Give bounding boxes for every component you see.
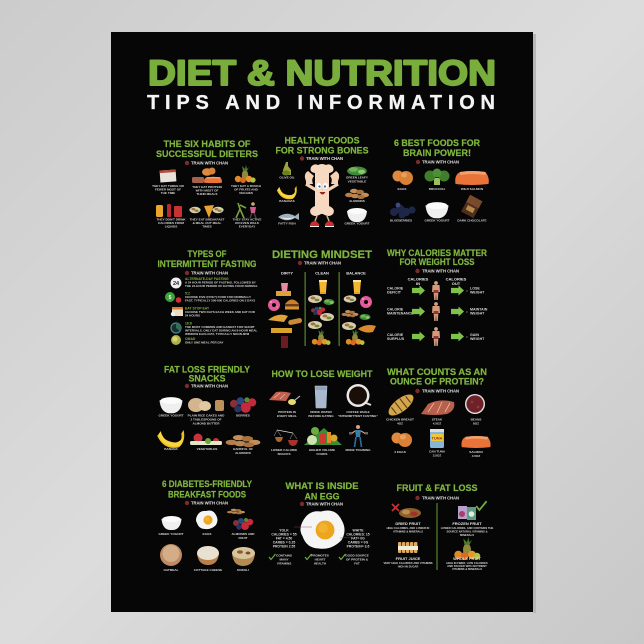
heading: DIETING MINDSET	[272, 249, 372, 261]
text: dried fruit: DRIED FRUIT	[395, 521, 421, 526]
row: maintenance: CALORIE	[387, 308, 403, 312]
icon: protein	[192, 168, 222, 183]
icon: check	[476, 501, 487, 510]
icon: fish	[278, 213, 299, 220]
row: maintenance: MAINTAIN	[470, 308, 487, 312]
heading: SUCCESSFUL DIETERS	[156, 149, 258, 160]
icon: broccoli	[424, 168, 450, 185]
icon: yogurt	[160, 397, 182, 413]
caption: MUESLI	[237, 568, 249, 572]
benefit: heart: HEALTH	[314, 562, 327, 566]
text: 16:8: WINDOW EACH DAY, TYPICALLY NOON-8PM	[185, 332, 250, 336]
icon: exercisers	[236, 202, 256, 218]
caption: OLIVE OIL	[279, 176, 295, 180]
heading	[276, 136, 368, 156]
caption: "INTERMITTENT FASTING"	[338, 414, 378, 418]
benefit: vitamins	[269, 554, 292, 566]
logo: TRAIN WITH CHAN	[304, 260, 341, 266]
caption: HIGHER VOLUME	[309, 448, 335, 452]
text: eat stop eat	[185, 306, 256, 318]
icon: beans	[465, 394, 485, 414]
row: maintenance: =	[466, 310, 468, 314]
panel: six habits	[152, 139, 262, 229]
icon: coffee cup	[346, 384, 371, 407]
caption: OATMEAL	[163, 568, 179, 572]
text: frozen fruit	[441, 521, 493, 537]
text: alternate day: THE 24-HOUR PERIOD OF EATING FOOD NORMAL	[185, 284, 258, 288]
icon: dark chocolate	[461, 195, 482, 218]
text: 16:8: THE MOST COMMON AND EASIEST FOR SHORT	[185, 325, 255, 329]
subtitle: TIPS AND INFORMATION	[147, 92, 495, 114]
icon: juice bottles	[398, 542, 418, 553]
caption: THEY EAT THREE OR	[152, 184, 184, 188]
heading: AN EGG	[304, 492, 340, 502]
icon: greens	[347, 166, 367, 176]
panel: diabetes breakfast	[158, 479, 255, 572]
caption: VEGGIES	[239, 191, 253, 195]
caption: 4.5OZ	[472, 454, 480, 458]
row: deficit: DEFICIT	[387, 290, 402, 294]
text: whole fruit: WHOLE FRUIT	[453, 556, 481, 561]
caption: GREEK YOGURT	[158, 532, 184, 536]
caption: EVERYDAY	[239, 225, 256, 229]
row: deficit: WEIGHT	[470, 290, 485, 294]
text: 5:2: FAST, TYPICALLY 500-600 CALORIES ON 2 DAYS	[185, 298, 255, 302]
icon: calendar	[171, 307, 183, 316]
column headers	[408, 276, 467, 286]
title: DIET & NUTRITION	[148, 54, 496, 93]
column headers: CALORIES	[408, 276, 428, 282]
caption: COFFEE WHILE	[346, 410, 370, 414]
caption: STEAK	[432, 418, 442, 422]
label: white: FAT= 0G	[351, 536, 365, 540]
heading: 6 DIABETES-FRIENDLY	[162, 479, 253, 490]
row: surplus: SURPLUS	[387, 337, 405, 341]
caption: 8OZ	[473, 422, 479, 426]
caption: THEY STAY ACTIVE	[233, 218, 261, 222]
row: surplus	[387, 327, 485, 346]
heading: WHAT IS INSIDE	[286, 481, 358, 492]
text: omad: OMAD	[185, 337, 196, 341]
caption: FOODS	[316, 452, 328, 456]
caption: SNACKS	[277, 452, 291, 456]
text: whole fruit: VITAMINS & MINERALS	[452, 567, 482, 571]
icon: steak	[421, 400, 454, 415]
column labels: BALANCE	[346, 270, 366, 276]
caption: 3 EGGS	[394, 450, 406, 454]
caption: BROCCOLI	[429, 187, 445, 191]
icon: 5:2: 5	[169, 295, 172, 301]
logo: TRAIN WITH CHAN	[306, 156, 343, 161]
benefit: vitamins: VITAMINS	[277, 562, 291, 566]
benefit: protein: OF PROTEIN &	[346, 558, 369, 562]
caption: WITH MOST OF	[196, 189, 219, 193]
caption: BANANAS	[279, 199, 295, 203]
poster shadow	[533, 34, 536, 613]
caption: THE TIME	[161, 191, 175, 195]
panel: ounce of protein	[385, 367, 491, 458]
caption: FATTY FISH	[278, 222, 296, 226]
icon: salmon	[455, 171, 489, 185]
icon: cottage cheese	[197, 546, 219, 565]
caption: GREEK YOGURT	[158, 414, 184, 418]
text: 5:2: 5:2	[185, 292, 190, 296]
caption: CAN TUNA	[429, 450, 445, 454]
heading: OUNCE OF PROTEIN?	[390, 376, 484, 388]
text: alternate day: A 24 HOUR PERIOD OF FASTING, FOLLOWED BY	[185, 280, 256, 284]
logo: TRAIN WITH CHAN	[422, 160, 459, 164]
label: yolk: YOLK	[279, 528, 289, 532]
icon: timer	[171, 323, 181, 333]
caption: HANDFUL OF	[233, 447, 253, 451]
text: whole fruit: AND PACKED WITH NUTRIENT	[447, 564, 487, 568]
text: omad: ONLY ONE MEAL PER DAY	[185, 340, 224, 344]
text: dried fruit: VITAMINS & MINERALS	[393, 530, 423, 534]
caption: GREEK YOGURT	[344, 222, 370, 226]
panel: dieting mindset	[268, 249, 376, 348]
icon: water glass	[315, 386, 327, 408]
heading: HOW TO LOSE WEIGHT	[272, 369, 373, 380]
icon: oatmeal	[160, 544, 182, 566]
row: maintenance	[387, 302, 488, 321]
icon: chicken breast	[385, 391, 417, 419]
column labels: CLEAN	[315, 270, 329, 276]
caption: THEY EAT A BUNCH	[231, 184, 261, 188]
text: frozen fruit: LOWER CALORIES, AND CONTAINS THE	[441, 526, 493, 530]
caption: EVERY MEAL	[277, 414, 297, 418]
heading: WHY CALORIES MATTER	[387, 248, 487, 259]
icon: yogurt	[347, 208, 367, 222]
icon: meals	[189, 205, 224, 218]
icon: fruit	[235, 165, 256, 183]
icon: eggs	[392, 432, 412, 447]
logo: TRAIN WITH CHAN	[422, 268, 459, 274]
panel: lose weight	[269, 369, 378, 456]
benefit: vitamins: CONTAINS	[276, 554, 292, 558]
icon: banana	[277, 186, 297, 199]
icon: vegetables	[190, 434, 222, 445]
caption: OF FRUITS AND	[234, 188, 259, 192]
heading: FAT LOSS FRIENDLY	[164, 364, 251, 376]
text: 5:2: CHOOSE FIVE (FIVE?) FOOD FOR NORMALLY	[185, 295, 251, 299]
text: 5:2	[185, 292, 255, 302]
icon: fried egg	[300, 511, 345, 549]
panel: why calories matter	[387, 248, 488, 346]
caption: MORE TRAINING	[345, 448, 371, 452]
heading: FOR STRONG BONES	[276, 146, 368, 156]
logo: TRAIN WITH CHAN	[191, 160, 228, 166]
caption: VEGETABLE	[348, 179, 366, 183]
benefit: vitamins: MANY	[279, 558, 289, 562]
text: omad	[185, 337, 224, 344]
caption: PROTEIN IN	[278, 410, 296, 414]
row: deficit	[387, 281, 485, 300]
heading	[394, 138, 480, 159]
text: eat stop eat: CHOOSE TWO DAYS EACH WEEK AND EAT FOR	[185, 310, 256, 314]
caption: VEGETABLES	[197, 447, 217, 451]
text: frozen fruit: SOURCE NATURAL VITAMINS &	[446, 530, 488, 534]
caption: ALMONDS	[235, 451, 251, 455]
heading	[286, 481, 358, 502]
text: whole fruit: HIGH IN FIBER, LOW CALORIES	[446, 561, 488, 565]
benefit: protein: GOOD SOURCE	[345, 554, 369, 558]
column labels: DIRTY	[281, 270, 293, 276]
label: yolk: PROTEIN 2.55	[273, 544, 295, 548]
column: balance foods	[342, 280, 376, 345]
icon: omad plate	[171, 335, 181, 345]
caption: BERRIES	[236, 414, 250, 418]
caption: GREEK YOGURT	[424, 218, 450, 222]
row: maintenance: MAINTENANCE	[387, 312, 414, 316]
caption: DRINK WATER	[310, 410, 332, 414]
caption: 3.5OZ	[433, 454, 441, 458]
text: fruit juice: FRUIT JUICE	[396, 556, 421, 561]
text: eat stop eat: EAT STOP EAT	[185, 306, 210, 310]
text: dried fruit: HIGH CALORIES, AND LOWER IN	[387, 526, 429, 530]
icon: almonds	[226, 435, 260, 447]
benefit: protein	[339, 554, 369, 566]
caption: DARK CHOCOLATE	[457, 218, 487, 222]
heading: HEALTHY FOODS	[284, 136, 360, 146]
caption: CHICKEN BREAST	[386, 418, 414, 422]
caption: SALMON	[469, 450, 483, 454]
icon: meat and protein scoop	[269, 392, 300, 405]
poster panel	[111, 32, 533, 612]
row: deficit: LOSE	[470, 286, 480, 290]
caption: 2 TABLESPOONS OF	[190, 418, 222, 422]
text: 16:8	[185, 322, 258, 336]
icon: blueberries	[390, 203, 416, 218]
row: deficit: CALORIE	[387, 286, 403, 290]
heading: THE SIX HABITS OF	[164, 139, 251, 150]
text: dried fruit	[387, 521, 429, 534]
logo: TRAIN WITH CHAN	[422, 388, 459, 394]
icon: whole fruit	[454, 537, 480, 560]
caption: THEY DON'T DRINK	[156, 218, 186, 222]
row: surplus: CALORIE	[387, 333, 403, 337]
caption: OR EVEN WALK	[235, 221, 260, 225]
caption: BLUEBERRIES	[390, 218, 412, 222]
caption: CALORIES FROM	[158, 221, 184, 225]
icon: salmon	[461, 436, 491, 448]
caption: EGGS	[398, 187, 406, 191]
icon: canned tuna: TUNA	[431, 436, 443, 440]
caption: & MEAL OUT MEAL	[193, 221, 222, 225]
heading: WHAT COUNTS AS AN	[387, 367, 487, 378]
icon: almonds	[345, 189, 369, 199]
label: yolk: CALORIES = 55	[271, 532, 297, 536]
label: white: PROTEIN= 3.6	[347, 544, 369, 548]
caption: PLAIN RICE CAKES AND	[188, 414, 224, 418]
icon: drinks	[156, 204, 182, 217]
caption: GREEN LEAFY	[346, 176, 368, 180]
icon: cross	[392, 504, 399, 511]
icon: frozen fruit bags	[458, 506, 476, 520]
column: dirty foods	[268, 283, 302, 348]
text: frozen fruit: FROZEN FRUIT	[452, 521, 482, 526]
caption: THEY EAT BREAKFAST	[190, 218, 224, 222]
text: whole fruit	[446, 556, 488, 571]
caption: LIQUIDS	[165, 225, 177, 229]
benefit: heart	[305, 554, 329, 566]
icon: dried fruit	[399, 508, 421, 518]
heading	[387, 248, 487, 268]
heading: INTERMITTENT FASTING	[158, 259, 256, 270]
text: fruit juice: VERY HIGH CALORIES AND VITAMINS	[383, 561, 433, 565]
panel: strong bones	[276, 136, 370, 227]
icon: yogurt	[426, 202, 448, 218]
icon: fried egg	[196, 510, 218, 529]
panel: snacks	[157, 364, 260, 455]
caption: THEIR MEALS	[197, 192, 217, 196]
icon: eggs	[392, 170, 413, 185]
icon: 24 clock: 24	[173, 281, 180, 287]
row: surplus: GAIN	[470, 333, 479, 337]
caption: ALMOND BUTTER	[193, 422, 220, 426]
heading: BREAKFAST FOODS	[168, 490, 246, 500]
icon: almonds and berries	[227, 509, 253, 530]
caption: WILD SALMON	[461, 187, 484, 191]
heading	[387, 367, 487, 388]
column headers: OUT	[452, 281, 461, 286]
icon: vegetables	[304, 427, 342, 445]
caption: ALMONDS AND	[231, 532, 255, 536]
caption: BEFORE EATING	[308, 414, 334, 418]
heading	[156, 139, 258, 160]
heading: 6 BEST FOODS FOR	[394, 138, 480, 149]
icon: scale	[274, 430, 298, 446]
heading: TYPES OF	[188, 249, 227, 260]
logo: TRAIN WITH CHAN	[191, 270, 228, 276]
row: surplus: =	[466, 335, 468, 339]
caption: LOWER CALORIE	[271, 448, 297, 452]
text: eat stop eat: 24 HOURS	[185, 314, 200, 318]
icon: banana	[157, 430, 184, 448]
caption: BANANA	[164, 447, 178, 451]
panel: fruit and fat loss	[383, 483, 493, 571]
heading	[162, 479, 253, 500]
heading: FOR WEIGHT LOSS	[400, 257, 474, 268]
panel: intermittent fasting	[158, 249, 258, 345]
caption: FRUIT	[238, 536, 248, 540]
benefit: protein: FAT	[354, 562, 360, 566]
icon: calendar	[160, 169, 176, 183]
row: surplus: WEIGHT	[470, 337, 485, 341]
caption: EGGS	[203, 532, 211, 536]
caption: COTTAGE CHEESE	[194, 568, 222, 572]
text: 16:8: INTERVALS. ONLY EAT DURING AN 8-HOUR MEAL	[185, 328, 258, 332]
column labels	[281, 270, 366, 276]
icon: rice cakes and butter	[188, 398, 224, 412]
icon: bone mascot	[305, 164, 339, 227]
label: yolk: FAT = 4.50	[276, 536, 292, 540]
label: white: CALORIES: 15	[346, 532, 370, 536]
heading: BRAIN POWER!	[403, 148, 471, 159]
heading	[158, 249, 256, 270]
caption: ALMONDS	[349, 199, 365, 203]
logo: TRAIN WITH CHAN	[191, 384, 228, 388]
caption: TIMES	[202, 225, 212, 229]
logo: TRAIN WITH CHAN	[422, 496, 459, 500]
icon: muesli	[232, 547, 255, 566]
logo: TRAIN WITH CHAN	[191, 500, 228, 506]
benefit: heart: HEART	[315, 558, 325, 562]
column: clean foods	[308, 280, 334, 345]
panel: brain foods	[390, 138, 489, 222]
heading	[164, 364, 251, 384]
text: alternate day	[185, 277, 258, 288]
icon: man training	[349, 425, 368, 447]
caption: 4.5OZ	[433, 422, 441, 426]
icon: olive oil	[282, 162, 291, 176]
heading: SNACKS	[188, 374, 226, 384]
row: maintenance: WEIGHT	[470, 312, 485, 316]
row: deficit: =	[466, 289, 468, 293]
column headers: CALORIES	[446, 276, 466, 282]
text: fruit juice: HIGH IN SUGAR	[398, 564, 418, 568]
text: frozen fruit: MINERALS	[460, 533, 474, 537]
icon: berries	[230, 397, 256, 413]
caption: BEANS	[471, 418, 481, 422]
text: fruit juice	[383, 556, 433, 568]
caption: THEY EAT PROTEIN	[192, 185, 222, 189]
text: 16:8: 16:8	[185, 322, 192, 326]
label: white: CARBS = 0G	[348, 540, 369, 544]
panel: inside an egg	[269, 481, 370, 566]
heading: FRUIT & FAT LOSS	[396, 483, 478, 494]
icon: yogurt	[162, 516, 182, 530]
label: white: WHITE	[353, 528, 363, 532]
text: alternate day: ALTERNATE-DAY FASTING	[185, 277, 229, 281]
caption: FEWER MOST OF	[155, 188, 181, 192]
caption: 4OZ	[397, 422, 403, 426]
benefit: heart: PROMOTES	[311, 554, 329, 558]
label: yolk: CARBS = 0.25	[273, 540, 295, 544]
column headers: IN	[416, 281, 420, 286]
logo: TRAIN WITH CHAN	[306, 502, 343, 506]
